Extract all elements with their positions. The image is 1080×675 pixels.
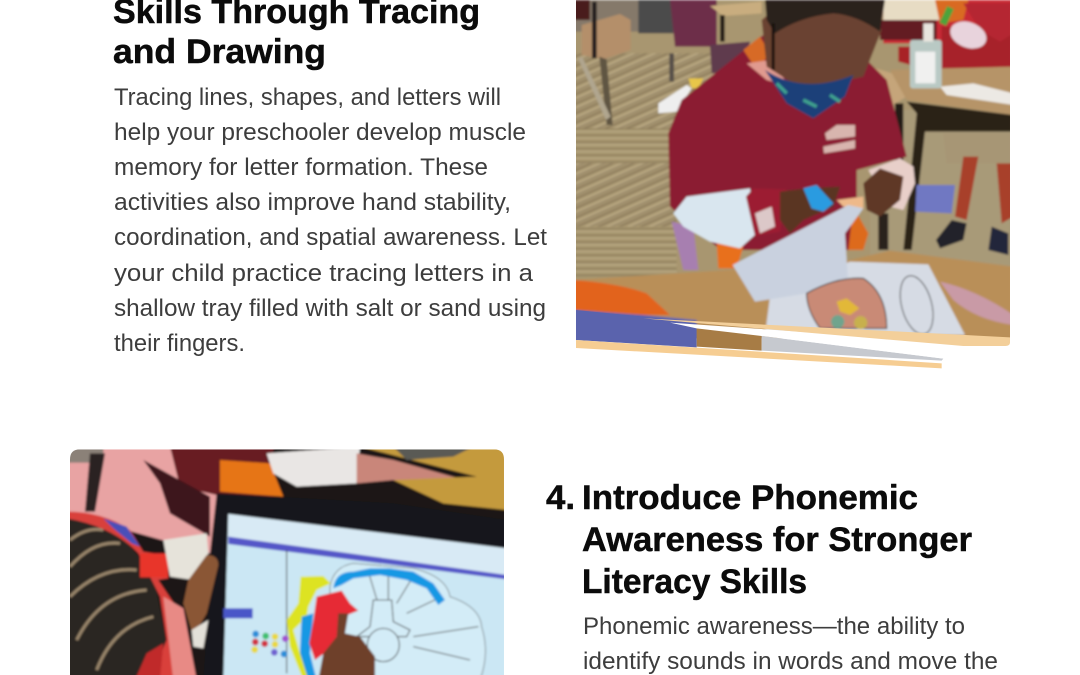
far sleeve	[868, 158, 915, 210]
lower orange strip	[576, 340, 942, 368]
right side table and classmate	[870, 0, 1013, 255]
hands	[780, 187, 840, 233]
color palette dots	[251, 631, 289, 657]
body text: tracing paragraph: memory for letter formation. These	[114, 154, 488, 181]
braided hair	[70, 520, 166, 675]
tablet frame	[203, 493, 507, 675]
tissue and holding hand	[163, 533, 218, 648]
heading: introduce phonemic awareness: Awareness for Stronger	[582, 521, 972, 559]
white slice	[670, 323, 1013, 359]
heading: introduce phonemic awareness: Literacy Skills	[582, 563, 807, 601]
heading: introduce phonemic awareness: Introduce Phonemic	[582, 479, 918, 517]
photo: child cutting paper at desk	[573, 0, 1013, 368]
child in maroon sweater	[668, 0, 915, 270]
body text: tracing paragraph: help your preschooler develop muscle	[114, 119, 526, 146]
heading: skills through tracing and drawing: and Drawing	[113, 33, 326, 71]
photo: student coloring turkey on tablet	[67, 447, 507, 675]
desk and worksheets	[573, 205, 1013, 342]
body text: tracing paragraph: activities also improve hand stability,	[114, 189, 511, 216]
body text: phonemic awareness paragraph: Phonemic awareness—the ability to	[583, 613, 965, 640]
classroom background furniture	[573, 0, 762, 125]
pointing hand	[318, 613, 375, 675]
body text: phonemic awareness paragraph	[583, 613, 998, 675]
heading: introduce phonemic awareness	[546, 479, 972, 601]
turkey drawing	[807, 278, 887, 329]
body text: tracing paragraph: Tracing lines, shapes, and letters will	[114, 84, 501, 111]
face mask	[765, 70, 853, 118]
sleeve	[673, 188, 757, 248]
heading: introduce phonemic awareness: 4.	[546, 479, 575, 517]
body text: phonemic awareness paragraph: identify sounds in words and move the	[583, 648, 998, 675]
grey paper slice	[762, 336, 943, 361]
carpet floor	[576, 0, 1010, 282]
blue scissors	[803, 185, 833, 212]
section 3 text	[113, 0, 547, 357]
turkey coloring page	[287, 563, 485, 675]
body text: tracing paragraph: your child practice tracing letters in a	[114, 260, 534, 287]
head	[762, 0, 885, 90]
section 4 text	[546, 479, 998, 675]
wood slice	[697, 328, 762, 351]
body text: tracing paragraph: coordination, and spatial awareness. Let	[114, 224, 547, 251]
background	[67, 447, 507, 675]
upper wood band	[643, 318, 1010, 346]
purple slice	[576, 310, 697, 347]
body text: tracing paragraph: their fingers.	[114, 330, 245, 357]
body text: tracing paragraph	[114, 84, 547, 357]
body text: tracing paragraph: shallow tray filled with salt or sand using	[114, 295, 546, 322]
headphones	[67, 512, 197, 675]
displaced image slices at bottom of photo	[576, 310, 1013, 368]
heading: skills through tracing and drawing	[113, 0, 480, 71]
tablet screen	[223, 514, 507, 675]
school logo	[823, 125, 855, 153]
